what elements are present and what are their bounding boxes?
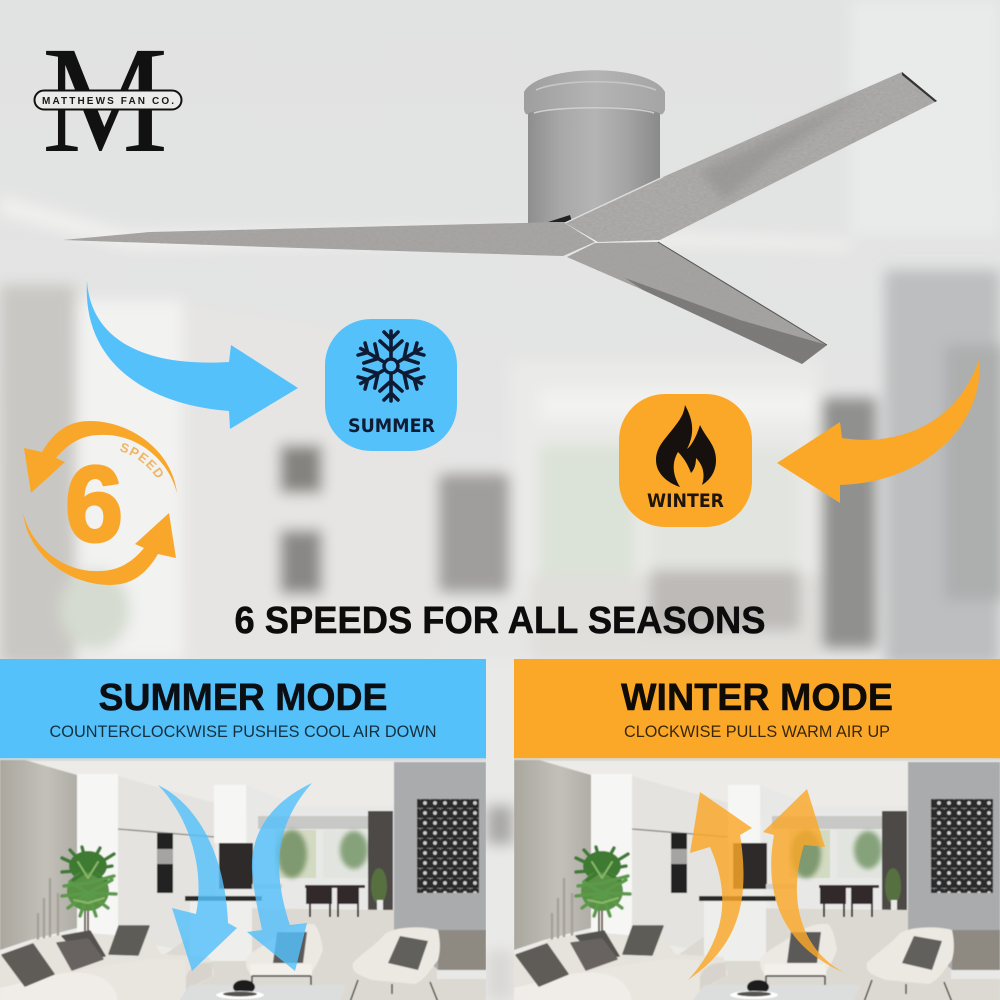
summer mode description: COUNTERCLOCKWISE PUSHES COOL AIR DOWN bbox=[50, 722, 436, 741]
headline: 6 SPEEDS FOR ALL SEASONS bbox=[234, 600, 766, 642]
logo: Matthews Fan Co. bbox=[34, 16, 182, 185]
orange upward air arrows bbox=[688, 789, 845, 980]
numeral 6: 6 bbox=[65, 443, 123, 564]
6 speed icon bbox=[23, 421, 177, 585]
summer mode title: SUMMER MODE bbox=[98, 677, 388, 719]
summer curved arrow bbox=[87, 281, 298, 429]
summer label: SUMMER bbox=[348, 415, 435, 437]
fan blade upper right bbox=[565, 72, 937, 242]
speed label: SPEED bbox=[120, 443, 163, 478]
summer badge bbox=[325, 319, 457, 451]
ceiling fan bbox=[63, 70, 937, 364]
logo monogram M: M bbox=[42, 16, 168, 185]
logo name pill: MATTHEWS FAN CO. bbox=[42, 96, 174, 107]
summer heading band bbox=[0, 659, 486, 759]
icon: snowflake bbox=[355, 331, 427, 401]
winter mode title: WINTER MODE bbox=[621, 677, 893, 719]
logo name pill bbox=[34, 90, 182, 110]
upper circular arrow bbox=[24, 421, 177, 493]
winter curved arrow bbox=[777, 360, 979, 503]
panel: winter mode bbox=[514, 659, 1000, 1000]
fan motor housing bbox=[524, 70, 665, 223]
winter room photo bbox=[514, 758, 1000, 1000]
fan blade lower right bbox=[567, 242, 827, 364]
lower circular arrow bbox=[23, 513, 176, 585]
winter badge bbox=[619, 394, 752, 527]
blue downward air arrows bbox=[158, 783, 312, 971]
summer room photo bbox=[0, 758, 486, 1000]
winter mode description: CLOCKWISE PULLS WARM AIR UP bbox=[624, 722, 890, 741]
panel: summer mode bbox=[0, 659, 486, 1000]
fan blade left bbox=[63, 222, 595, 256]
winter heading band bbox=[514, 659, 1000, 759]
icon: flame bbox=[656, 405, 716, 487]
winter label: WINTER bbox=[647, 490, 724, 512]
